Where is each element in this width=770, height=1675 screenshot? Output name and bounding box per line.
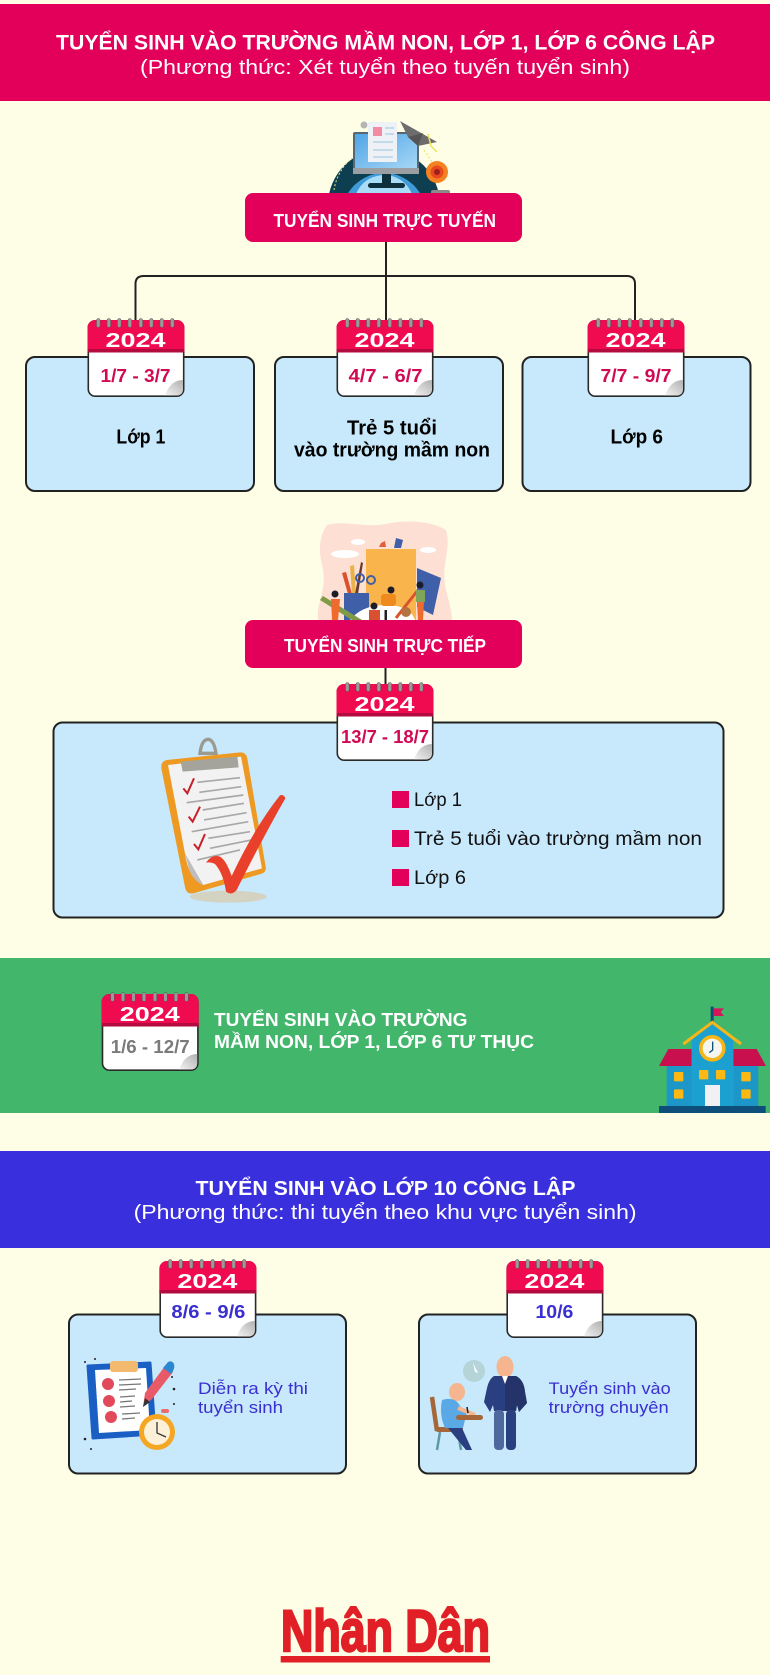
bullet: grade 6: Lớp 6 xyxy=(414,868,466,889)
icon: children with books and pencils xyxy=(318,522,452,622)
panel: entrance exam: Diễn ra kỳ thi xyxy=(198,1379,308,1398)
calendar: 7/7 - 9/7: 7/7 - 9/7 xyxy=(600,366,672,386)
panel: grade 6 online: Lớp 6 xyxy=(610,426,663,448)
header: public preschool, grade 1, grade 6 admission: (Phương thức: Xét tuyển theo tuyến tuyển sinh) xyxy=(140,56,630,79)
panel: specialised school admission: Tuyển sinh vào xyxy=(549,1379,671,1398)
calendar: 1/7 - 3/7: 1/7 - 3/7 xyxy=(100,366,170,386)
panel: specialised school admission: trường chuyên xyxy=(549,1398,669,1417)
panel: grade 6 online xyxy=(522,357,750,491)
header: public grade 10 admission: TUYỂN SINH VÀO LỚP 10 CÔNG LẬP xyxy=(196,1176,576,1200)
icon: clipboard with checkmark xyxy=(161,739,285,903)
logo: Nhân Dân: Nhân Dân xyxy=(281,1599,490,1664)
header: public grade 10 admission xyxy=(0,1151,770,1248)
panel: 5-year-olds online: vào trường mầm non xyxy=(294,440,490,462)
calendar: 8/6 - 9/6 xyxy=(159,1260,256,1337)
calendar: 10/6: 2024 xyxy=(524,1271,586,1293)
pill: online admission xyxy=(245,193,522,242)
connector tree xyxy=(136,242,635,320)
icon: computer with graduation cap xyxy=(329,121,450,193)
panel: 5-year-olds online: Trẻ 5 tuổi xyxy=(347,418,437,440)
calendar: 7/7 - 9/7 xyxy=(588,318,684,396)
calendar: 1/7 - 3/7: 2024 xyxy=(106,330,167,352)
panel: grade 1 online xyxy=(26,357,254,491)
band: private school admission xyxy=(0,958,770,1113)
band: private school admission: TUYỂN SINH VÀO TRƯỜNG xyxy=(214,1009,468,1030)
header: public preschool, grade 1, grade 6 admission xyxy=(0,4,770,101)
calendar: 1/6 - 12/7: 2024 xyxy=(120,1004,181,1026)
calendar: 10/6 xyxy=(506,1260,603,1337)
calendar: 8/6 - 9/6: 8/6 - 9/6 xyxy=(171,1302,245,1322)
bullet: grade 6 xyxy=(392,868,466,889)
header: public grade 10 admission: (Phương thức: thi tuyển theo khu vực tuyển sinh) xyxy=(134,1201,637,1224)
pill: online admission: TUYỂN SINH TRỰC TUYẾN xyxy=(274,210,496,231)
band: private school admission: MẦM NON, LỚP 1, LỚP 6 TƯ THỤC xyxy=(214,1031,534,1052)
icon: teacher and student at desk xyxy=(432,1356,527,1450)
connector: pill to calendar xyxy=(384,668,386,684)
calendar: 4/7 - 6/7: 4/7 - 6/7 xyxy=(348,366,422,386)
header: public preschool, grade 1, grade 6 admission: TUYỂN SINH VÀO TRƯỜNG MẦM NON, LỚP 1, LỚP 6 CÔNG LẬP xyxy=(56,30,715,54)
calendar: 1/6 - 12/7 xyxy=(102,992,199,1070)
panel: 5-year-olds online xyxy=(275,357,503,491)
calendar: 8/6 - 9/6: 2024 xyxy=(177,1271,239,1293)
panel: grade 1 online: Lớp 1 xyxy=(116,426,165,448)
calendar: 1/6 - 12/7: 1/6 - 12/7 xyxy=(111,1037,190,1057)
calendar: 4/7 - 6/7: 2024 xyxy=(354,330,416,352)
panel: in-person admission list xyxy=(54,722,724,918)
panel: entrance exam: tuyển sinh xyxy=(198,1398,283,1417)
bullet: grade 1 xyxy=(392,790,462,811)
bullet: 5-year-olds: Trẻ 5 tuổi vào trường mầm non xyxy=(414,829,702,850)
calendar: 10/6: 10/6 xyxy=(535,1302,573,1322)
bullet: grade 1: Lớp 1 xyxy=(414,790,462,811)
icon: exam clipboard with stopwatch xyxy=(84,1358,175,1450)
calendar: 13/7 - 18/7: 13/7 - 18/7 xyxy=(341,727,429,747)
calendar: 4/7 - 6/7 xyxy=(336,318,434,396)
icon: school building xyxy=(659,1007,766,1113)
pill: in-person admission xyxy=(245,620,522,668)
pill: in-person admission: TUYỂN SINH TRỰC TIẾP xyxy=(284,635,486,656)
calendar: 7/7 - 9/7: 2024 xyxy=(606,330,667,352)
calendar: 1/7 - 3/7 xyxy=(88,318,184,396)
calendar: 13/7 - 18/7 xyxy=(336,682,434,760)
panel: entrance exam xyxy=(69,1314,346,1474)
calendar: 13/7 - 18/7: 2024 xyxy=(354,694,416,716)
panel: specialised school admission xyxy=(419,1314,696,1474)
